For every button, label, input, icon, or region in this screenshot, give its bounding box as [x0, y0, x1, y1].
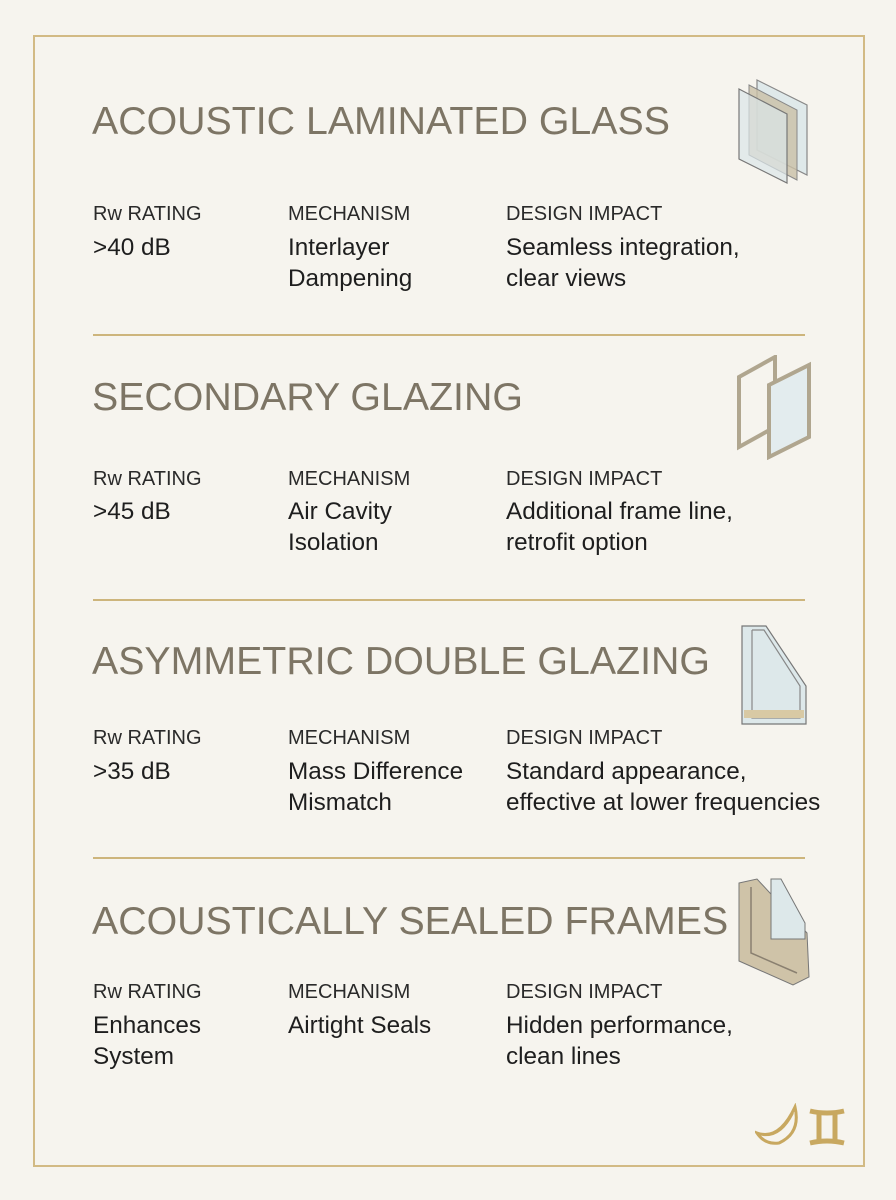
text: Mass Difference: [288, 758, 463, 785]
text: DESIGN IMPACT: [506, 727, 662, 749]
text: Additional frame line,: [506, 498, 733, 525]
text: >40 dB: [93, 234, 171, 261]
text: MECHANISM: [288, 727, 410, 749]
text: Rw RATING: [93, 727, 202, 749]
text: MECHANISM: [288, 468, 410, 490]
text: Mismatch: [288, 789, 392, 816]
title: acoustic laminated glass: ACOUSTIC LAMINATED GLASS: [92, 99, 670, 143]
text: retrofit option: [506, 529, 648, 556]
icon: secondary glazing frames: [737, 355, 811, 460]
row 1 data: [93, 203, 740, 292]
text: >45 dB: [93, 498, 171, 525]
row 4 data: [93, 981, 733, 1070]
text: Hidden performance,: [506, 1012, 733, 1039]
row 2 data: [93, 468, 733, 556]
text: Dampening: [288, 265, 412, 292]
text: Rw RATING: [93, 981, 202, 1003]
text: MECHANISM: [288, 203, 410, 225]
text: Air Cavity: [288, 498, 392, 525]
text: DESIGN IMPACT: [506, 981, 662, 1003]
text: DESIGN IMPACT: [506, 468, 662, 490]
row 3 data: [93, 727, 820, 816]
text: clean lines: [506, 1043, 621, 1070]
title: secondary glazing: SECONDARY GLAZING: [92, 375, 523, 419]
text: Rw RATING: [93, 203, 202, 225]
text: clear views: [506, 265, 626, 292]
text: Enhances: [93, 1012, 201, 1039]
title: acoustically sealed frames: ACOUSTICALLY SEALED FRAMES: [92, 899, 728, 943]
text: Isolation: [288, 529, 378, 556]
text: Interlayer: [288, 234, 389, 261]
text: System: [93, 1043, 174, 1070]
title: asymmetric double glazing: ASYMMETRIC DOUBLE GLAZING: [92, 639, 710, 683]
icon: double glazing section: [741, 625, 807, 725]
text: Seamless integration,: [506, 234, 740, 261]
text: MECHANISM: [288, 981, 410, 1003]
icon: laminated glass: [738, 79, 808, 184]
text: Standard appearance,: [506, 758, 746, 785]
text: >35 dB: [93, 758, 171, 785]
text: effective at lower frequencies: [506, 789, 820, 816]
logo marks: [755, 1103, 844, 1146]
text: Rw RATING: [93, 468, 202, 490]
text: DESIGN IMPACT: [506, 203, 662, 225]
icon: frame profile: [738, 878, 810, 986]
text: Airtight Seals: [288, 1012, 431, 1039]
